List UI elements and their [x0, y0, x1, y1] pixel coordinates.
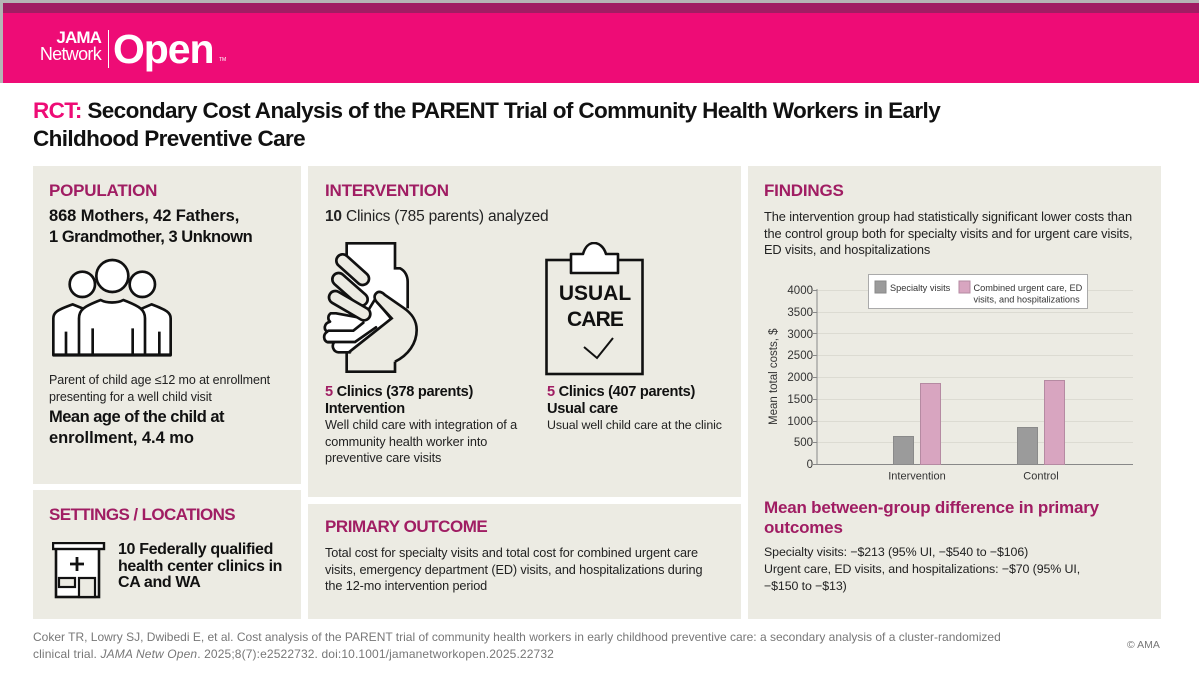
findings text: the control group both for specialty visits and for urgent care visits,	[764, 226, 1132, 240]
x axis labels: Intervention	[888, 470, 946, 482]
findings text: The intervention group had statistically significant lower costs than	[764, 209, 1132, 224]
logo: JAMA Network Open: JAMA	[56, 28, 101, 47]
panel: intervention	[308, 166, 741, 497]
logo: JAMA Network Open: Network	[40, 44, 101, 64]
mean child age	[49, 408, 224, 447]
heading: mean between-group difference: outcomes	[764, 518, 843, 537]
primary outcome text: visits, emergency department (ED) visits, and hospitalizations during	[325, 562, 702, 576]
y axis labels: 3500	[787, 307, 813, 319]
heading: mean between-group difference	[764, 498, 1099, 537]
mean child age: Mean age of the child at	[49, 408, 224, 426]
findings text: ED visits, and hospitalizations	[764, 242, 930, 257]
intervention arm text: Well child care with integration of a	[325, 418, 517, 432]
population counts: 1 Grandmother, 3 Unknown	[49, 228, 252, 246]
header band	[0, 0, 1199, 83]
legend	[868, 274, 1088, 308]
y axis labels: 0	[807, 459, 813, 471]
heading: intervention: INTERVENTION	[325, 181, 449, 200]
panel: settings / locations	[33, 490, 301, 619]
settings text: CA and WA	[118, 574, 200, 591]
intervention arm text	[325, 384, 518, 465]
usual care arm text	[547, 384, 722, 432]
panel: primary outcome	[308, 504, 741, 619]
icon: usual care clipboard: USUAL	[559, 282, 631, 305]
population criteria: Parent of child age ≤12 mo at enrollment	[49, 373, 270, 387]
settings text: health center clinics in	[118, 558, 282, 574]
icon: group of people	[52, 258, 172, 357]
logo: JAMA Network Open: Open	[113, 26, 213, 72]
legend: Combined urgent care, ED	[974, 283, 1083, 293]
between-group results: Urgent care, ED visits, and hospitalizations: −$70 (95% UI,	[764, 562, 1080, 576]
bar chart: Control	[1023, 470, 1059, 482]
icon: usual care clipboard: CARE	[567, 308, 624, 331]
y axis labels: 1500	[787, 394, 813, 406]
population criteria	[49, 373, 270, 404]
usual care arm text: 5 Clinics (407 parents)	[547, 384, 695, 400]
citation	[33, 630, 1001, 661]
icon: usual care clipboard	[545, 242, 644, 376]
population counts	[49, 207, 252, 246]
primary outcome text	[325, 546, 702, 593]
intervention arm text: community health worker into	[325, 435, 487, 449]
heading: settings: SETTINGS / LOCATIONS	[49, 505, 235, 524]
settings text	[118, 541, 282, 591]
heading: primary outcome: PRIMARY OUTCOME	[325, 517, 487, 536]
primary outcome text: the 12-mo intervention period	[325, 579, 487, 593]
logo: JAMA Network Open	[40, 26, 226, 72]
panel: population	[33, 166, 301, 484]
legend: visits, and hospitalizations	[974, 294, 1080, 304]
clinic count: 10 Clinics (785 parents) analyzed	[325, 208, 548, 225]
y axis labels: 2000	[787, 372, 813, 384]
panel: findings	[748, 166, 1161, 619]
y axis labels: 2500	[787, 350, 813, 362]
y axis labels: 3000	[787, 329, 813, 341]
citation: Coker TR, Lowry SJ, Dwibedi E, et al. Cost analysis of the PARENT trial of community health workers in early childhood preventive care: a secondary analysis of a cluster-randomized	[33, 630, 1001, 644]
title	[33, 98, 941, 151]
logo: JAMA Network Open: TM	[219, 57, 226, 63]
intervention arm text: Intervention	[325, 401, 405, 417]
bar chart	[768, 274, 1133, 482]
heading: findings: FINDINGS	[764, 181, 844, 200]
population counts: 868 Mothers, 42 Fathers,	[49, 207, 239, 225]
intervention arm text: 5 Clinics (378 parents)	[325, 384, 473, 400]
settings text: 10 Federally qualified	[118, 541, 273, 558]
heading: population: POPULATION	[49, 181, 157, 200]
y axis labels	[787, 285, 813, 471]
between-group results	[764, 545, 1080, 593]
population criteria: presenting for a well child visit	[49, 390, 212, 404]
bars	[894, 380, 1064, 464]
y axis labels: 1000	[787, 416, 813, 428]
title: Childhood Preventive Care	[33, 126, 305, 151]
bar chart: Mean total costs, $	[768, 328, 780, 425]
usual care arm text: Usual care	[547, 401, 618, 417]
usual care arm text: Usual well child care at the clinic	[547, 418, 722, 432]
between-group results: Specialty visits: −$213 (95% UI, −$540 to −$106)	[764, 545, 1028, 559]
primary outcome text: Total cost for specialty visits and total cost for combined urgent care	[325, 546, 698, 560]
icon: hands holding	[322, 242, 418, 373]
title: RCT: Secondary Cost Analysis of the PARENT Trial of Community Health Workers in Early	[33, 98, 940, 123]
between-group results: −$150 to −$13)	[764, 579, 847, 593]
intervention arm text: preventive care visits	[325, 451, 441, 465]
mean child age: enrollment, 4.4 mo	[49, 429, 194, 447]
icon: clinic building	[52, 542, 106, 598]
copyright: © AMA	[1127, 639, 1160, 651]
y axis labels: 500	[794, 437, 813, 449]
citation: clinical trial. JAMA Netw Open. 2025;8(7):e2522732. doi:10.1001/jamanetworkopen.2025.22732	[33, 647, 554, 661]
heading: mean between-group difference: Mean between-group difference in primary	[764, 498, 1099, 517]
y axis labels: 4000	[787, 285, 813, 297]
legend: Specialty visits	[890, 283, 951, 293]
findings text	[764, 209, 1132, 257]
